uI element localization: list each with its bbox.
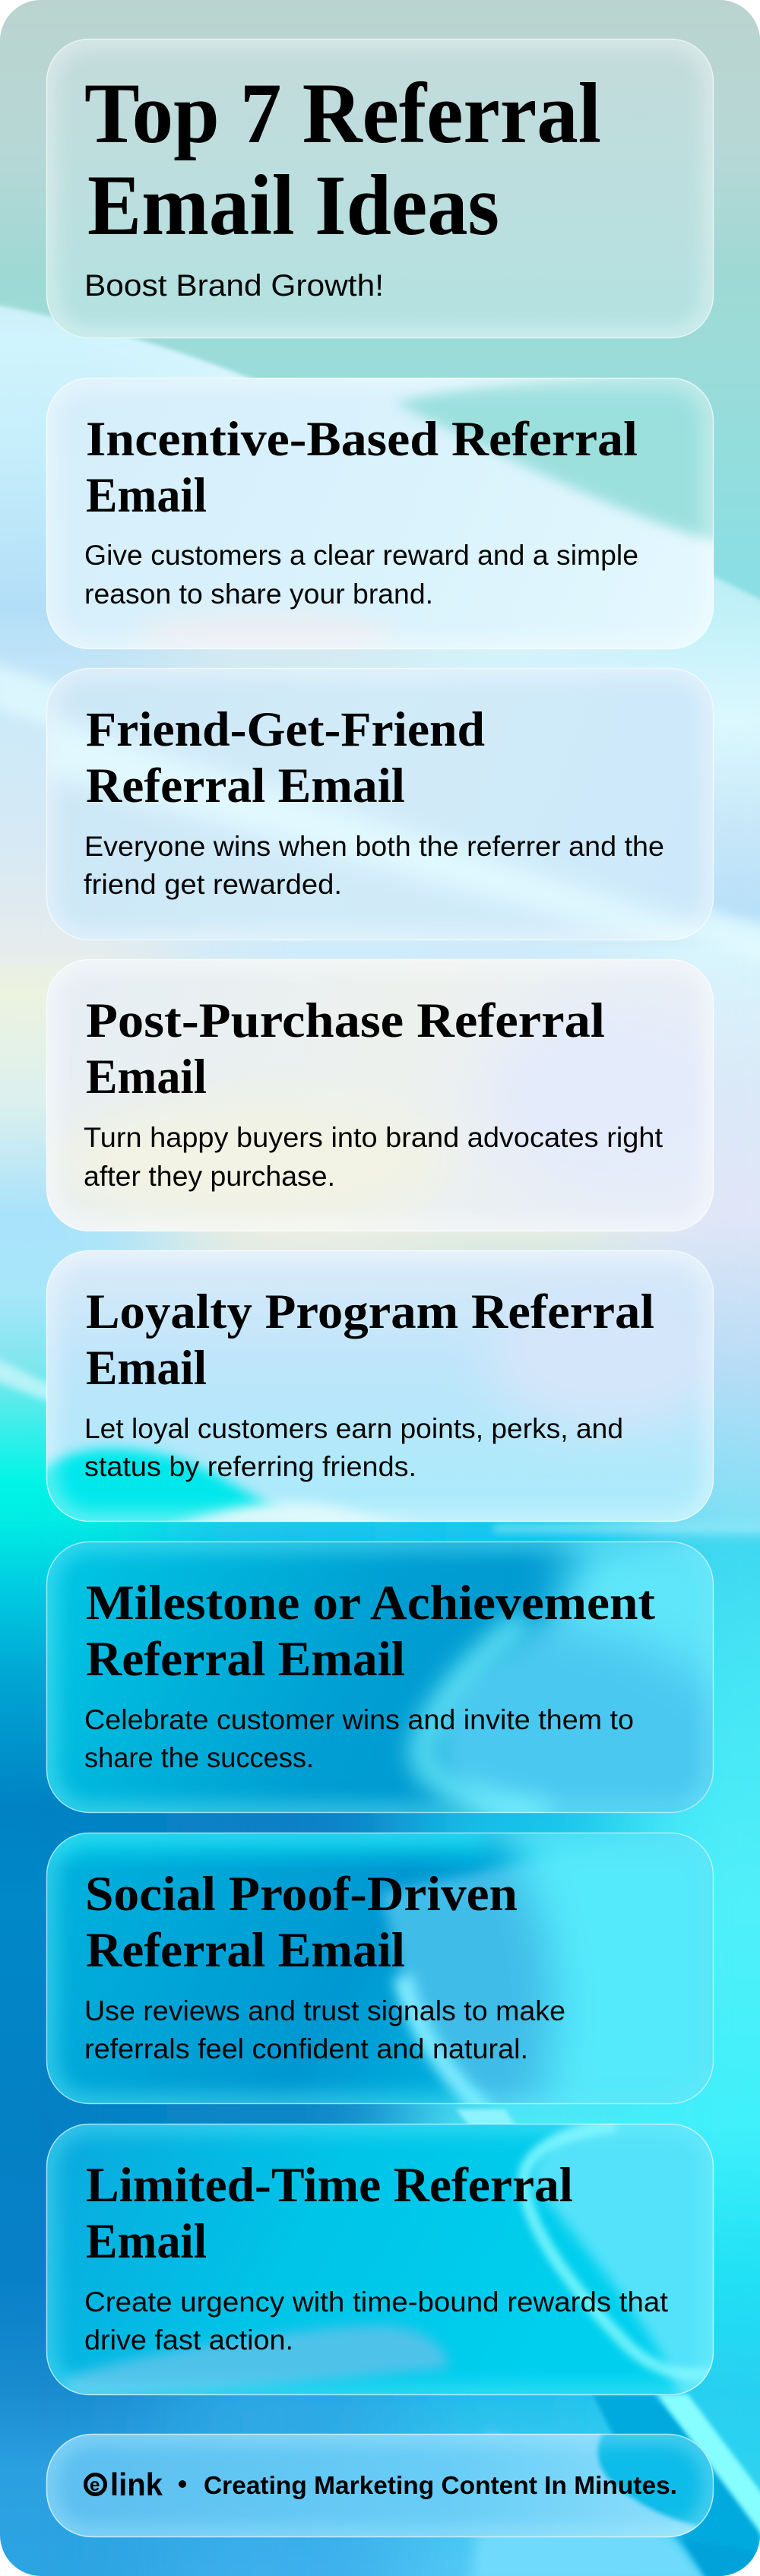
- description: after they purchase.: [84, 1161, 335, 1192]
- description: Give customers a clear reward and a simple: [84, 540, 638, 571]
- panel glass: [30, 1824, 730, 2121]
- description: Celebrate customer wins and invite them to: [84, 1704, 634, 1735]
- description: [84, 831, 664, 900]
- heading: Referral Email: [86, 1632, 405, 1687]
- heading: [86, 993, 605, 1104]
- title: Email Ideas: [87, 158, 499, 253]
- heading: [86, 1576, 655, 1687]
- heading: [86, 412, 638, 523]
- heading: Post-Purchase Referral: [86, 993, 605, 1048]
- panel glass: [46, 365, 730, 657]
- description: reason to share your brand.: [84, 578, 433, 610]
- heading: Loyalty Program Referral: [86, 1285, 654, 1339]
- panel glass: [46, 668, 714, 959]
- heading: Email: [86, 468, 207, 523]
- heading: Email: [86, 2214, 207, 2269]
- description: status by referring friends.: [84, 1451, 416, 1482]
- heading: Incentive-Based Referral: [86, 412, 638, 467]
- description: Turn happy buyers into brand advocates right: [84, 1122, 663, 1153]
- heading: [86, 2158, 573, 2269]
- panel glass: [46, 39, 714, 338]
- description: [84, 1704, 634, 1773]
- panel: friend-get-friend referral email: [46, 668, 714, 959]
- heading: [86, 1285, 654, 1396]
- description: [84, 1995, 565, 2064]
- heading: Referral Email: [86, 1923, 405, 1978]
- panel glass: [46, 959, 730, 1231]
- description: drive fast action.: [84, 2324, 293, 2356]
- title: [84, 66, 601, 253]
- panel: milestone or achievement referral email: [46, 1535, 730, 1824]
- description: Use reviews and trust signals to make: [84, 1995, 565, 2026]
- subtitle: Boost Brand Growth!: [84, 269, 384, 303]
- heading: Milestone or Achievement: [86, 1576, 655, 1630]
- description: referrals feel confident and natural.: [84, 2033, 528, 2064]
- title: Top 7 Referral: [84, 66, 601, 161]
- bullet: [179, 2480, 186, 2488]
- panel: loyalty program referral email: [30, 1250, 730, 1528]
- panel glass: [46, 2425, 730, 2537]
- heading: Email: [86, 1341, 207, 1396]
- description: Create urgency with time-bound rewards that: [84, 2286, 669, 2318]
- heading: Limited-Time Referral: [86, 2158, 573, 2213]
- tagline: Creating Marketing Content In Minutes.: [204, 2471, 677, 2499]
- heading: [85, 1867, 518, 1978]
- panel: social proof-driven referral email: [30, 1824, 730, 2121]
- heading: [86, 702, 485, 813]
- description: [84, 2286, 669, 2356]
- description: Let loyal customers earn points, perks, and: [84, 1413, 623, 1444]
- panel: footer: [46, 2425, 730, 2537]
- heading: Social Proof-Driven: [85, 1867, 518, 1922]
- panel glass: [30, 1250, 730, 1528]
- panel: limited-time referral email: [46, 2113, 730, 2410]
- description: Everyone wins when both the referrer and the: [84, 831, 664, 862]
- panel glass: [46, 1535, 730, 1824]
- panel: incentive-based referral email: [46, 365, 730, 657]
- heading: Referral Email: [86, 759, 405, 813]
- description: [84, 1122, 663, 1192]
- heading: Email: [86, 1050, 207, 1104]
- logo: elink: e: [90, 2475, 100, 2495]
- description: [84, 540, 638, 610]
- panel: header: [46, 39, 714, 338]
- description: friend get rewarded.: [84, 869, 342, 900]
- logo: elink: link: [110, 2467, 163, 2502]
- panel glass: [46, 2113, 730, 2410]
- panel: post-purchase referral email: [46, 959, 730, 1231]
- description: [84, 1413, 623, 1482]
- description: share the success.: [84, 1742, 314, 1773]
- logo: elink: [85, 2467, 163, 2502]
- heading: Friend-Get-Friend: [86, 702, 485, 757]
